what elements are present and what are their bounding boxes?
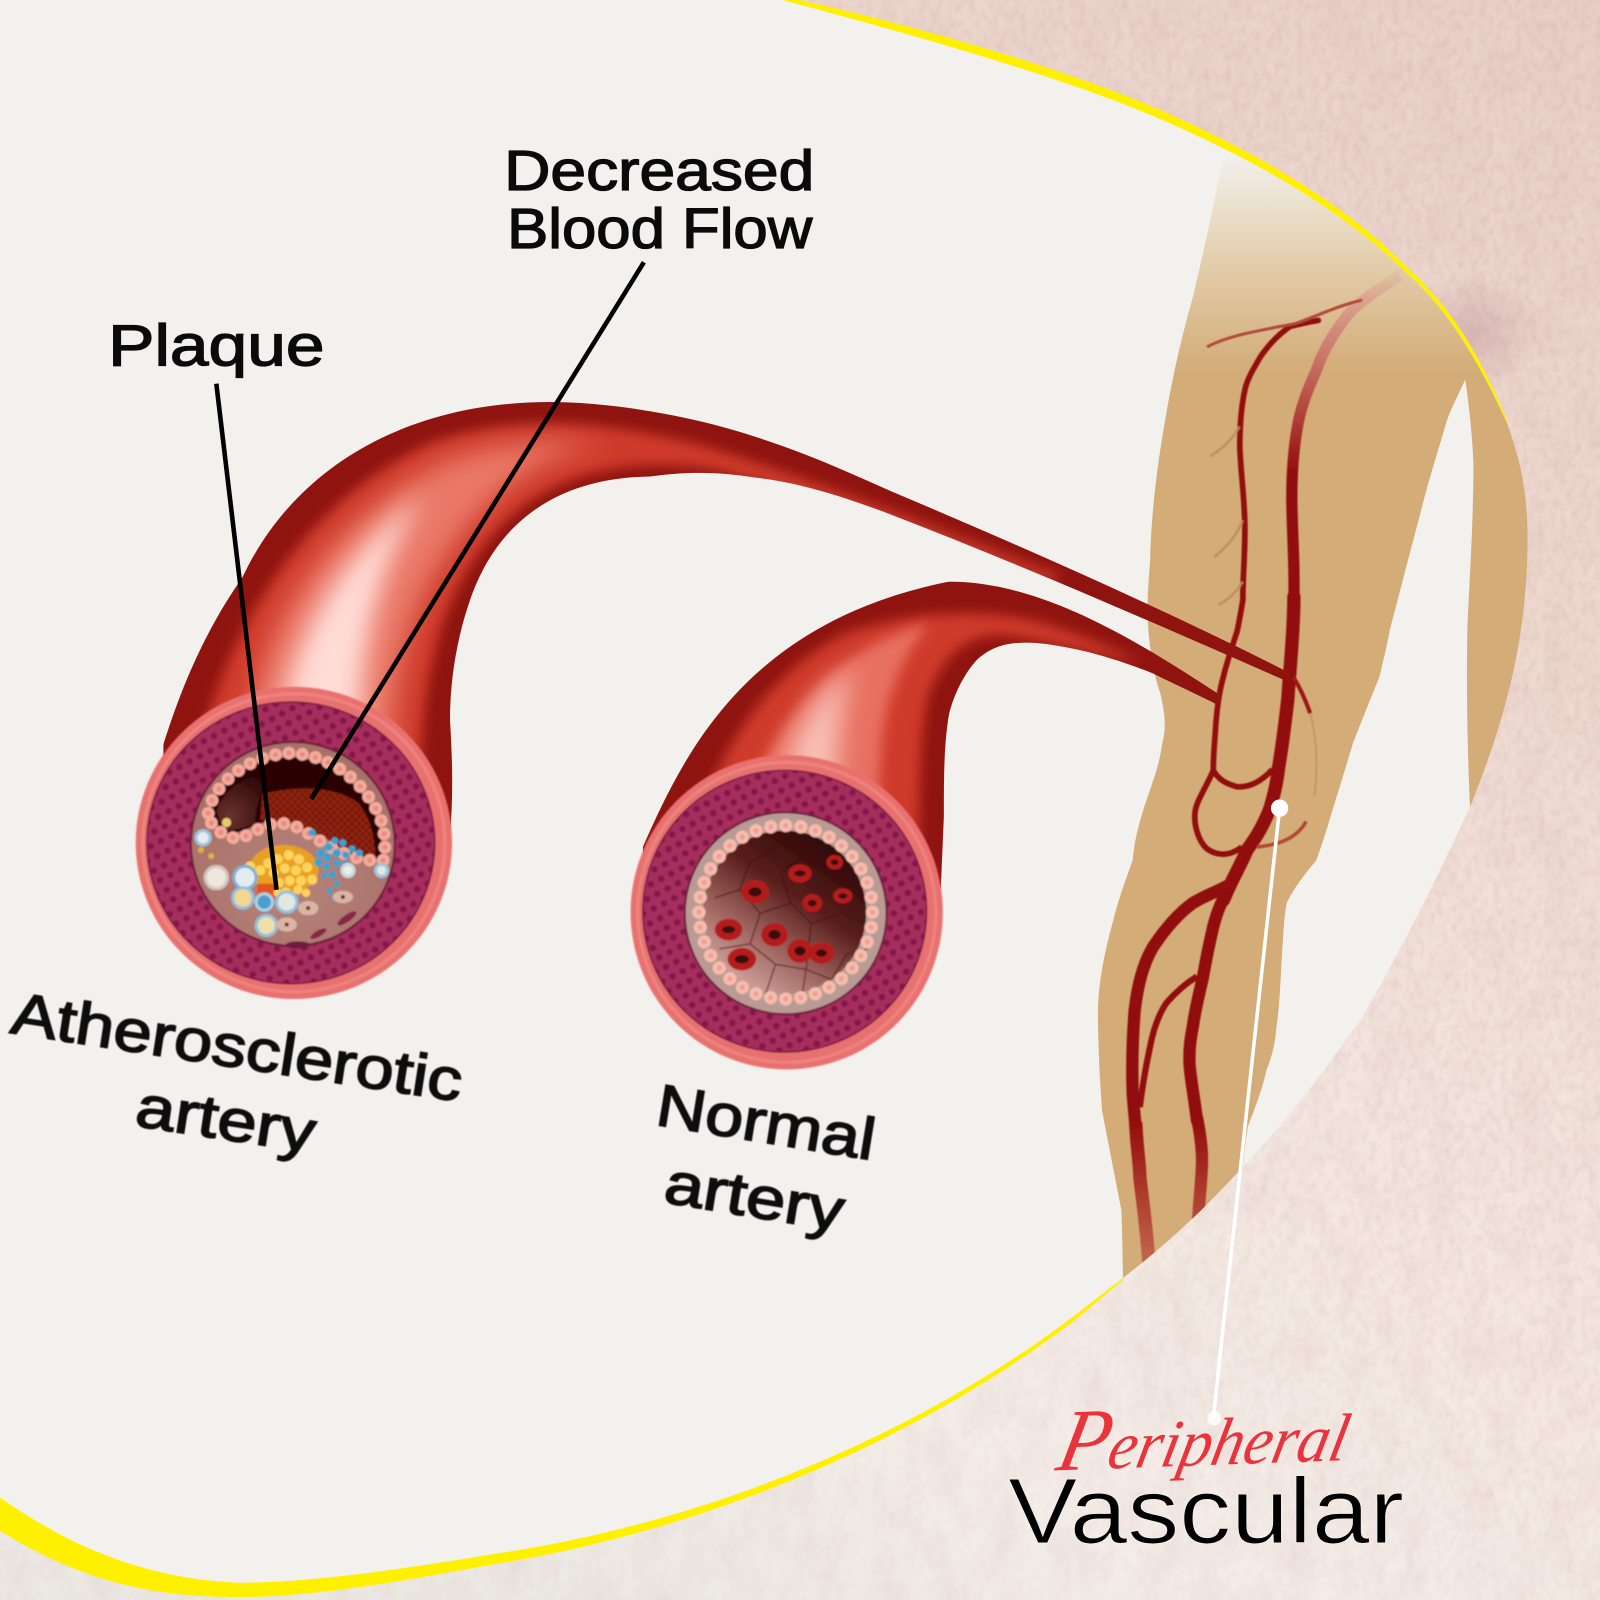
- lumen: [210, 757, 382, 859]
- deep thigh artery: [1213, 320, 1318, 770]
- heading: decreased blood flow: Decreased: [504, 139, 814, 202]
- title: Peripheral Vascular: [1008, 1383, 1404, 1563]
- brown cells and small deposits: [198, 818, 358, 948]
- blood clot: [260, 788, 376, 857]
- lower inner branch: [1132, 886, 1228, 1128]
- femoral artery: [1292, 276, 1400, 600]
- lower outer branch: [1189, 886, 1230, 1120]
- lumen: [703, 831, 866, 994]
- knee loops: [1213, 769, 1272, 787]
- media ring: [643, 770, 927, 1052]
- adventitia ring: [136, 687, 452, 999]
- small side branches: [1210, 427, 1243, 605]
- pointer line: plaque: [216, 384, 277, 890]
- media ring: [147, 702, 435, 984]
- intima disc and plaque base: [191, 742, 395, 946]
- connecting branch: [1140, 977, 1197, 1107]
- plaque lipid core: [245, 845, 318, 898]
- leg arteries: [1132, 276, 1400, 1265]
- label: atherosclerotic artery: [7, 979, 467, 1166]
- endothelial cells along lumen: [208, 753, 385, 861]
- upper lateral branch: [1207, 300, 1362, 347]
- pointer line: decreased blood flow: [311, 262, 644, 799]
- blue particles: [309, 829, 363, 901]
- title: Peripheral Vascular: Peripheral: [1049, 1383, 1360, 1490]
- endothelial cells ring: [699, 826, 872, 999]
- leg silhouette: [1098, 152, 1528, 1278]
- foam cells: [196, 831, 388, 936]
- adventitia ring: [631, 755, 943, 1069]
- intima disc: [685, 812, 887, 1014]
- label: atherosclerotic artery: artery: [132, 1072, 321, 1166]
- main leg artery: [1223, 597, 1294, 900]
- label: atherosclerotic artery: Atherosclerotic: [7, 979, 467, 1114]
- normal artery tube: [642, 582, 1218, 888]
- cross-section: atherosclerotic artery: [136, 687, 452, 999]
- blocked artery tube: [163, 402, 1284, 830]
- label: normal artery: artery: [660, 1149, 850, 1244]
- brown wall shading: [216, 773, 267, 830]
- title: Peripheral Vascular: Vascular: [1008, 1459, 1404, 1563]
- cross-section: normal artery: [631, 755, 943, 1069]
- heading: decreased blood flow: [504, 139, 814, 260]
- endothelial cell lines: [714, 847, 867, 1002]
- white leader line from leg to title: [1207, 799, 1288, 1426]
- label: normal artery: Normal: [652, 1071, 880, 1173]
- red blood cells: [718, 857, 850, 967]
- leg illustration: [1098, 152, 1528, 1278]
- faded calf arteries: [1197, 1117, 1202, 1224]
- heading: plaque: Plaque: [108, 313, 324, 378]
- label: normal artery: [652, 1071, 880, 1244]
- heading: decreased blood flow: Blood Flow: [507, 197, 813, 260]
